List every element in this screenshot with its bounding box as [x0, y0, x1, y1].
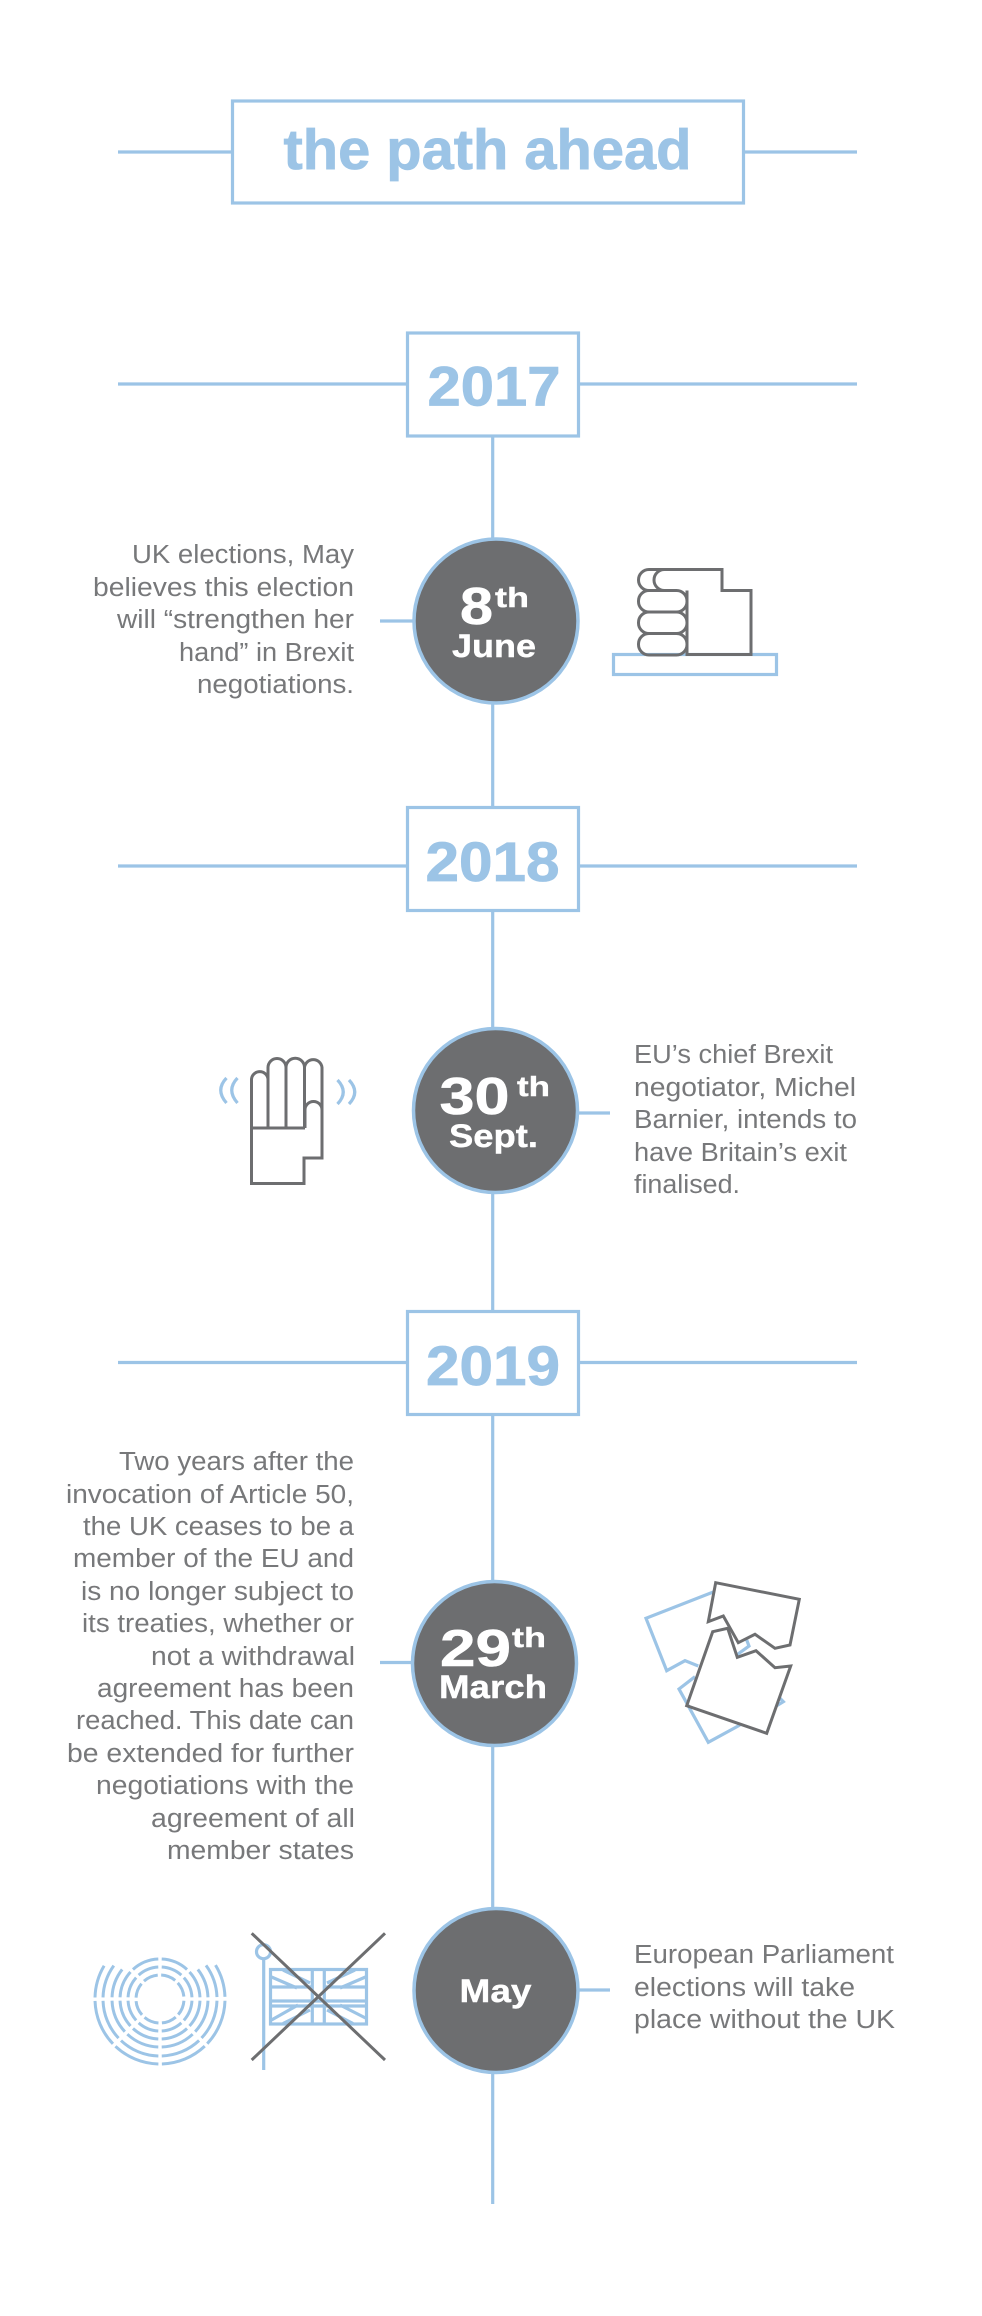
connector: [578, 1111, 610, 1115]
description text: Two years after the: [119, 1448, 354, 1476]
timeline spine: [491, 436, 494, 2204]
description text: elections will take: [634, 1974, 855, 2002]
title: the path ahead: [284, 118, 692, 182]
year marker: 2017: 2017: [428, 354, 560, 418]
panel: 30th Sept.: [221, 1028, 857, 1199]
year marker: 2018: [118, 808, 857, 910]
description text: finalised.: [634, 1171, 740, 1199]
panel: May: [95, 1908, 895, 2072]
year marker: 2019: 2019: [426, 1334, 560, 1397]
date badge: 29th March: th: [512, 1622, 546, 1653]
description text: [66, 1448, 355, 1865]
connector: [380, 1661, 413, 1664]
description text: negotiator, Michel: [634, 1074, 856, 1102]
date badge: 30th Sept.: [414, 1028, 578, 1192]
description text: place without the UK: [634, 2006, 895, 2034]
description text: European Parliament: [634, 1941, 894, 1969]
description text: [634, 1041, 857, 1199]
description text: member of the EU and: [73, 1545, 354, 1573]
description text: UK elections, May: [132, 541, 354, 569]
date badge: 29th March: 29: [440, 1620, 511, 1678]
date badge: 30th Sept.: Sept.: [449, 1118, 538, 1154]
description text: EU’s chief Brexit: [634, 1041, 833, 1069]
date badge: 8th June: 8: [460, 578, 493, 636]
description text: negotiations with the: [96, 1772, 354, 1800]
panel: 8th June: [93, 539, 776, 703]
description text: is no longer subject to: [81, 1578, 354, 1606]
description text: its treaties, whether or: [82, 1610, 355, 1638]
date badge: 8th June: th: [495, 582, 529, 613]
icon: parliament seating: [95, 1934, 225, 2064]
date badge: May: May: [460, 1973, 532, 2009]
description text: be extended for further: [67, 1740, 355, 1768]
description text: reached. This date can: [76, 1707, 354, 1735]
description text: will “strengthen her: [116, 606, 355, 634]
description text: negotiations.: [197, 671, 354, 699]
date badge: May: [414, 1908, 578, 2072]
date badge: 30th Sept.: 30: [440, 1068, 510, 1126]
description text: [93, 541, 355, 699]
description text: have Britain’s exit: [634, 1139, 847, 1167]
date badge: 8th June: [414, 539, 578, 703]
icon: raised waving hand: [221, 1058, 355, 1184]
icon: torn paper: [646, 1583, 799, 1742]
date badge: 29th March: [412, 1582, 576, 1746]
description text: hand” in Brexit: [179, 639, 354, 667]
description text: agreement of all: [151, 1805, 355, 1833]
date badge: 8th June: June: [452, 628, 536, 664]
connector: [578, 1988, 610, 1992]
description text: not a withdrawal: [151, 1643, 355, 1671]
description text: invocation of Article 50,: [66, 1481, 354, 1509]
title banner: [118, 101, 857, 203]
description text: believes this election: [93, 574, 354, 602]
description text: member states: [167, 1837, 354, 1865]
panel: 29th March: [66, 1448, 799, 1865]
description text: agreement has been: [97, 1675, 354, 1703]
description text: Barnier, intends to: [634, 1106, 857, 1134]
connector: [380, 619, 414, 623]
year marker: 2019: [118, 1312, 857, 1414]
description text: the UK ceases to be a: [83, 1513, 355, 1541]
icon: crossed-out union flag: [252, 1933, 385, 2070]
date badge: 29th March: March: [439, 1669, 547, 1705]
year marker: 2017: [118, 333, 857, 436]
description text: [634, 1941, 895, 2034]
year marker: 2018: 2018: [426, 830, 560, 893]
icon: fist on ballot box: [614, 570, 776, 674]
date badge: 30th Sept.: th: [517, 1071, 550, 1102]
